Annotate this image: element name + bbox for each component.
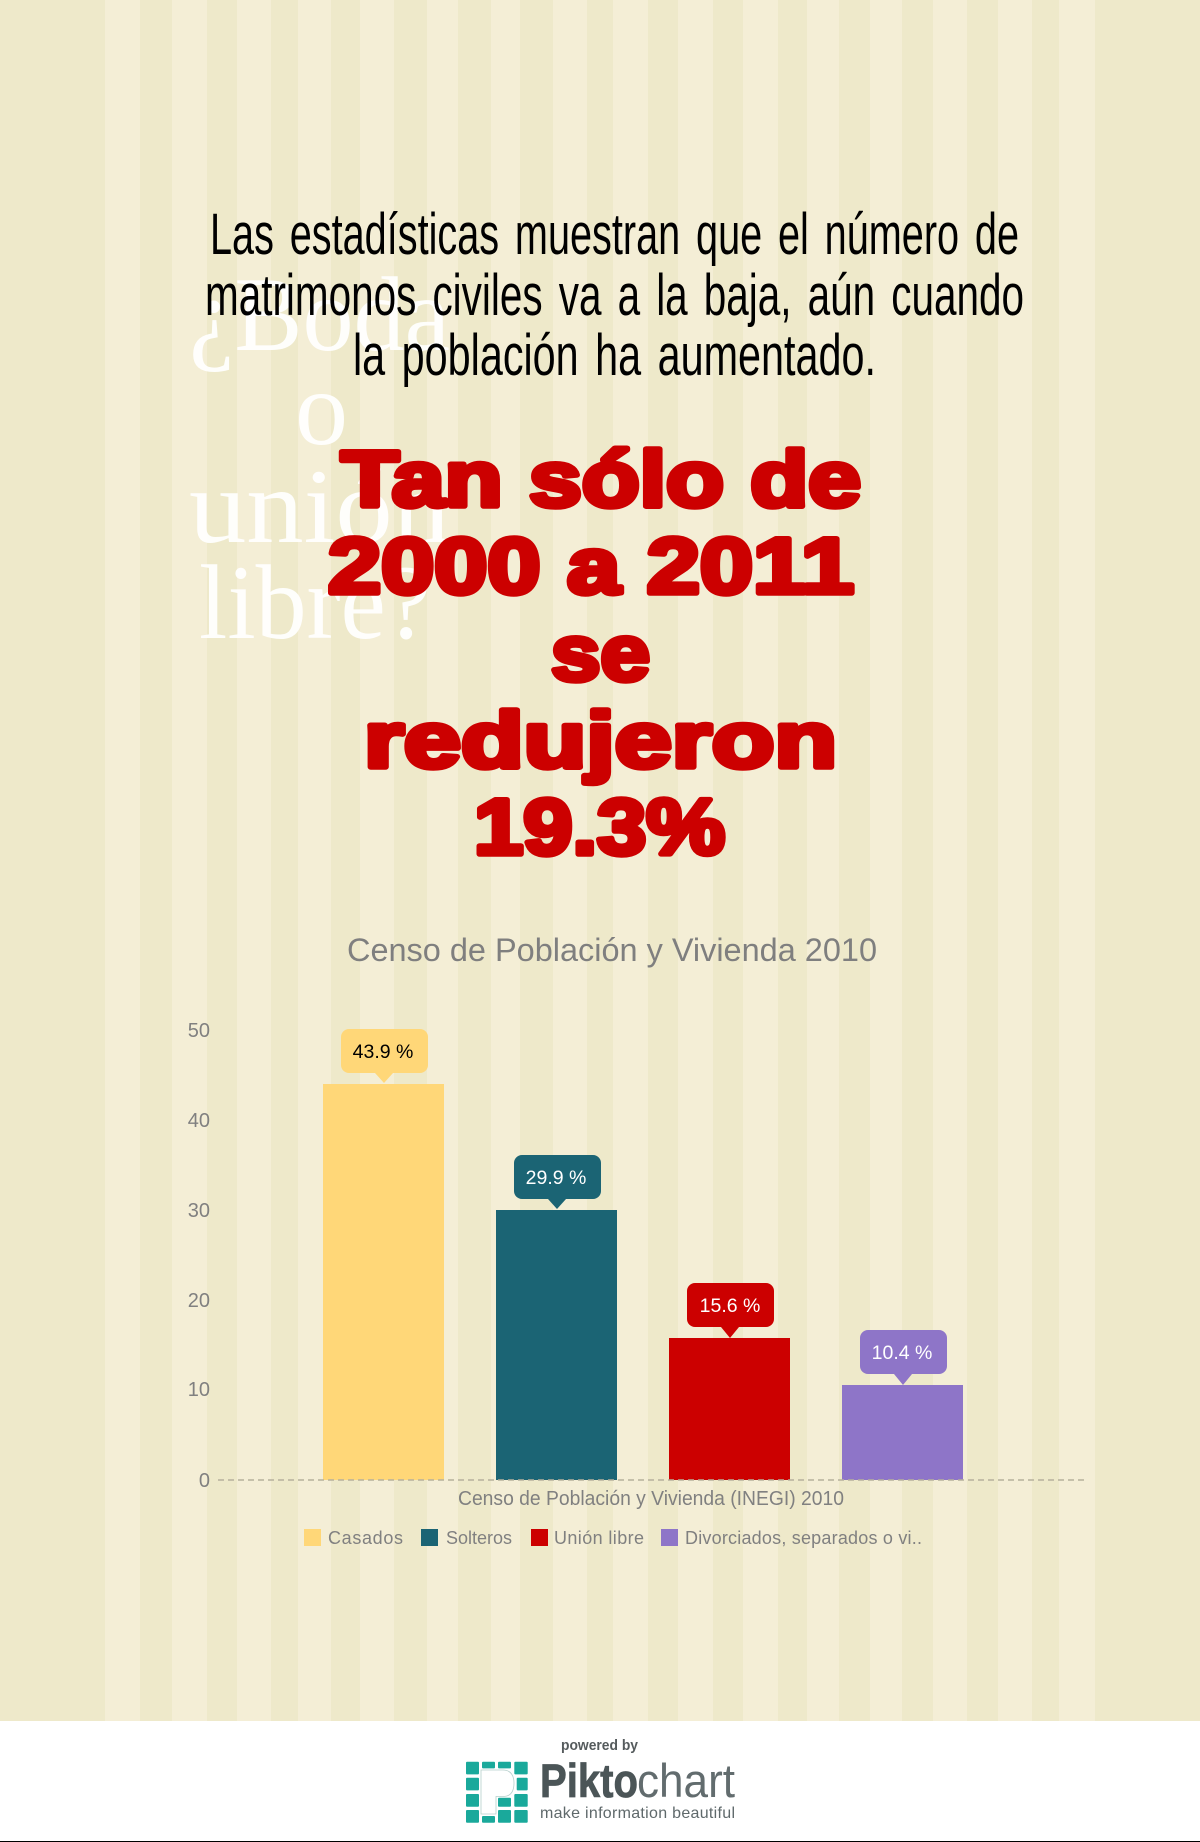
legend: Casados bbox=[328, 1528, 403, 1548]
callout: 43.9 % bbox=[341, 1029, 428, 1083]
Piktochart wordmark: chart bbox=[637, 1754, 735, 1807]
legend: Unión libre bbox=[554, 1528, 644, 1548]
intro text block bbox=[205, 202, 1024, 388]
callout: 15.6 % bbox=[687, 1283, 774, 1338]
baseline bbox=[218, 1479, 1086, 1481]
white background title: o bbox=[295, 350, 348, 467]
bar chart bbox=[188, 1020, 1086, 1548]
y axis labels bbox=[188, 1020, 210, 1492]
callout: 10.4 % bbox=[860, 1330, 947, 1385]
headline statistic bbox=[328, 434, 861, 871]
x axis category label: Censo de Población y Vivienda (INEGI) 2010 bbox=[458, 1488, 844, 1510]
powered by label: powered by bbox=[561, 1737, 639, 1754]
chart title: Censo de Población y Vivienda 2010 bbox=[347, 932, 877, 968]
headline statistic: redujeron bbox=[364, 695, 837, 784]
bar: Unión libre 15.6 bbox=[669, 1338, 790, 1480]
y axis labels: 0 bbox=[199, 1470, 210, 1492]
tagline: make information beautiful bbox=[540, 1805, 735, 1822]
white background title bbox=[189, 256, 450, 661]
bar: Casados 43.9 bbox=[323, 1084, 444, 1480]
callout: 29.9 % bbox=[514, 1155, 601, 1209]
callout: 10.4 %: 10.4 % bbox=[872, 1342, 932, 1364]
y axis labels: 10 bbox=[188, 1379, 210, 1401]
legend bbox=[304, 1528, 922, 1548]
bar: Divorciados 10.4 bbox=[842, 1385, 963, 1480]
callout: 15.6 %: 15.6 % bbox=[700, 1295, 760, 1317]
bar: Solteros 29.9 bbox=[496, 1210, 617, 1480]
Piktochart wordmark bbox=[540, 1754, 735, 1807]
intro text block: la población ha aumentado. bbox=[353, 323, 876, 388]
headline statistic: 2000 a 2011 bbox=[328, 521, 854, 610]
headline statistic: 19.3% bbox=[474, 782, 725, 871]
headline statistic: se bbox=[551, 608, 650, 697]
white background title: ¿Boda bbox=[189, 256, 450, 373]
Piktochart wordmark: Pikto bbox=[540, 1754, 638, 1807]
white background title: libre? bbox=[199, 544, 431, 661]
callout: 43.9 %: 43.9 % bbox=[353, 1041, 413, 1063]
white background title: unión bbox=[189, 448, 450, 565]
legend: Divorciados, separados o vi.. bbox=[685, 1528, 922, 1548]
legend: Solteros bbox=[446, 1528, 512, 1548]
callout: 29.9 %: 29.9 % bbox=[526, 1167, 586, 1189]
y axis labels: 50 bbox=[188, 1020, 210, 1042]
y axis labels: 30 bbox=[188, 1200, 210, 1222]
footer band bbox=[0, 1721, 1200, 1842]
headline statistic: Tan sólo de bbox=[341, 434, 861, 523]
icon: Piktochart logo bbox=[466, 1762, 528, 1823]
y axis labels: 20 bbox=[188, 1290, 210, 1312]
y axis labels: 40 bbox=[188, 1110, 210, 1132]
